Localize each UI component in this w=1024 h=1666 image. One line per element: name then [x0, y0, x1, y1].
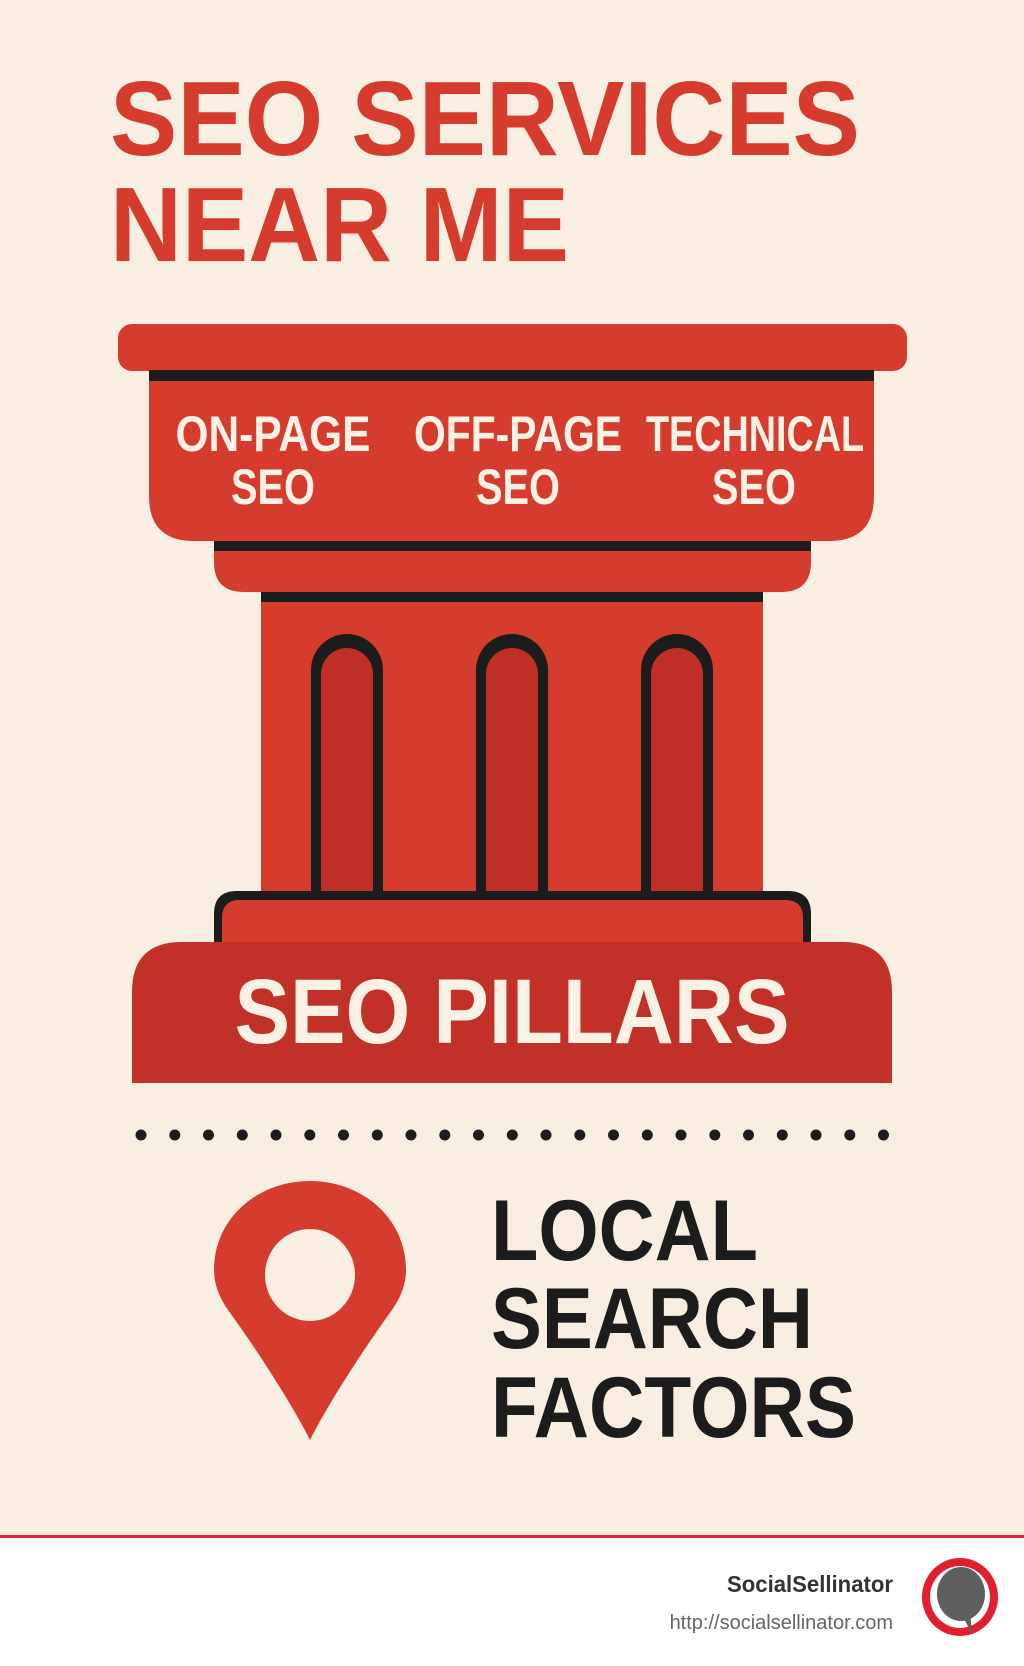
footer brand text: http://socialsellinator.com: [670, 1612, 893, 1634]
footer brand text: [670, 1571, 893, 1634]
icon: location pin: [214, 1181, 406, 1440]
flutes: [311, 634, 713, 894]
icon: logo: [922, 1558, 998, 1636]
pillar illustration: [118, 324, 907, 1083]
heading: local search factors: SEARCH: [491, 1271, 813, 1367]
shaft: [261, 602, 763, 894]
column labels: OFF-PAGE: [414, 406, 622, 462]
column labels: SEO: [231, 459, 315, 515]
footer brand text: SocialSellinator: [727, 1571, 893, 1597]
column labels: SEO: [712, 459, 796, 515]
title: NEAR ME: [110, 166, 569, 284]
footer: [0, 1535, 1024, 1666]
dotted divider: [136, 1130, 889, 1140]
heading: local search factors: LOCAL: [491, 1183, 758, 1279]
top cap slab: [118, 324, 907, 371]
column labels: [176, 406, 864, 515]
capital body: [149, 381, 874, 541]
base step: [214, 891, 811, 944]
title: SEO SERVICES: [110, 60, 860, 178]
heading: local search factors: FACTORS: [491, 1360, 856, 1456]
title: [110, 60, 860, 284]
column labels: ON-PAGE: [176, 406, 370, 462]
base label: SEO PILLARS: [234, 961, 790, 1063]
base plinth: [132, 942, 892, 1083]
heading: local search factors: [491, 1183, 856, 1456]
column labels: SEO: [476, 459, 560, 515]
column labels: TECHNICAL: [646, 406, 864, 462]
